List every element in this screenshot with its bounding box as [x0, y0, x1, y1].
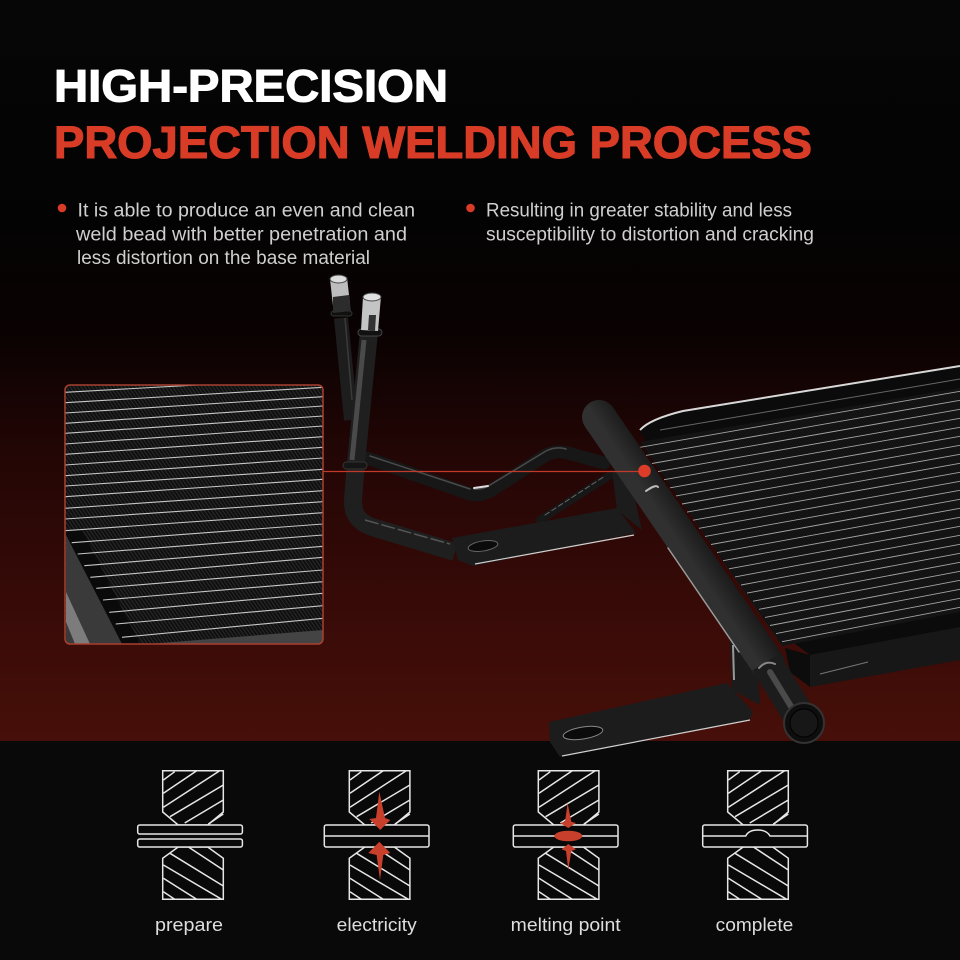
process step: complete	[703, 771, 807, 935]
bullet text: right: Resulting in greater stability and less	[486, 201, 792, 222]
icon: electrodes with current arrows	[324, 771, 429, 899]
pipe: upper routing	[367, 448, 612, 520]
process step: prepare	[138, 771, 242, 935]
product: transmission oil cooler	[330, 275, 960, 757]
bullet dot	[466, 204, 475, 212]
label: melting point	[511, 914, 621, 935]
callout dot	[638, 465, 651, 477]
title line 2: PROJECTION WELDING PROCESS	[54, 117, 812, 168]
process step: electricity	[324, 771, 429, 935]
manifold tube	[599, 417, 803, 722]
bottom process panel background	[0, 741, 960, 960]
radiator core	[640, 366, 960, 687]
lower mounting bracket	[549, 640, 760, 757]
title	[54, 60, 812, 168]
bullet text: left: weld bead with better penetration and	[75, 225, 407, 246]
callout line	[323, 470, 644, 472]
bullet text: left: It is able to produce an even and clean	[78, 201, 415, 222]
label: electricity	[337, 914, 417, 935]
upper mounting bracket	[452, 470, 642, 566]
bullet text: left	[58, 201, 415, 269]
manifold tube end cap	[784, 703, 824, 743]
background gradient	[0, 0, 960, 741]
bullet text: right: susceptibility to distortion and cracking	[486, 225, 814, 246]
title line 1: HIGH-PRECISION	[54, 60, 448, 112]
icon: electrodes with weld nugget	[513, 771, 618, 899]
label: prepare	[155, 914, 223, 935]
pipe: rear inlet	[330, 275, 352, 420]
icon: electrodes with finished weld	[703, 771, 807, 899]
process step: melting point	[511, 771, 621, 935]
label: complete	[716, 914, 793, 935]
bullet dot	[58, 204, 66, 212]
bullet text: left: less distortion on the base material	[77, 248, 370, 269]
pipe: front outlet	[343, 293, 455, 552]
bullet text: right	[466, 201, 814, 246]
icon: electrodes and separated plates	[138, 771, 242, 899]
detail inset: fin close-up	[65, 378, 323, 644]
